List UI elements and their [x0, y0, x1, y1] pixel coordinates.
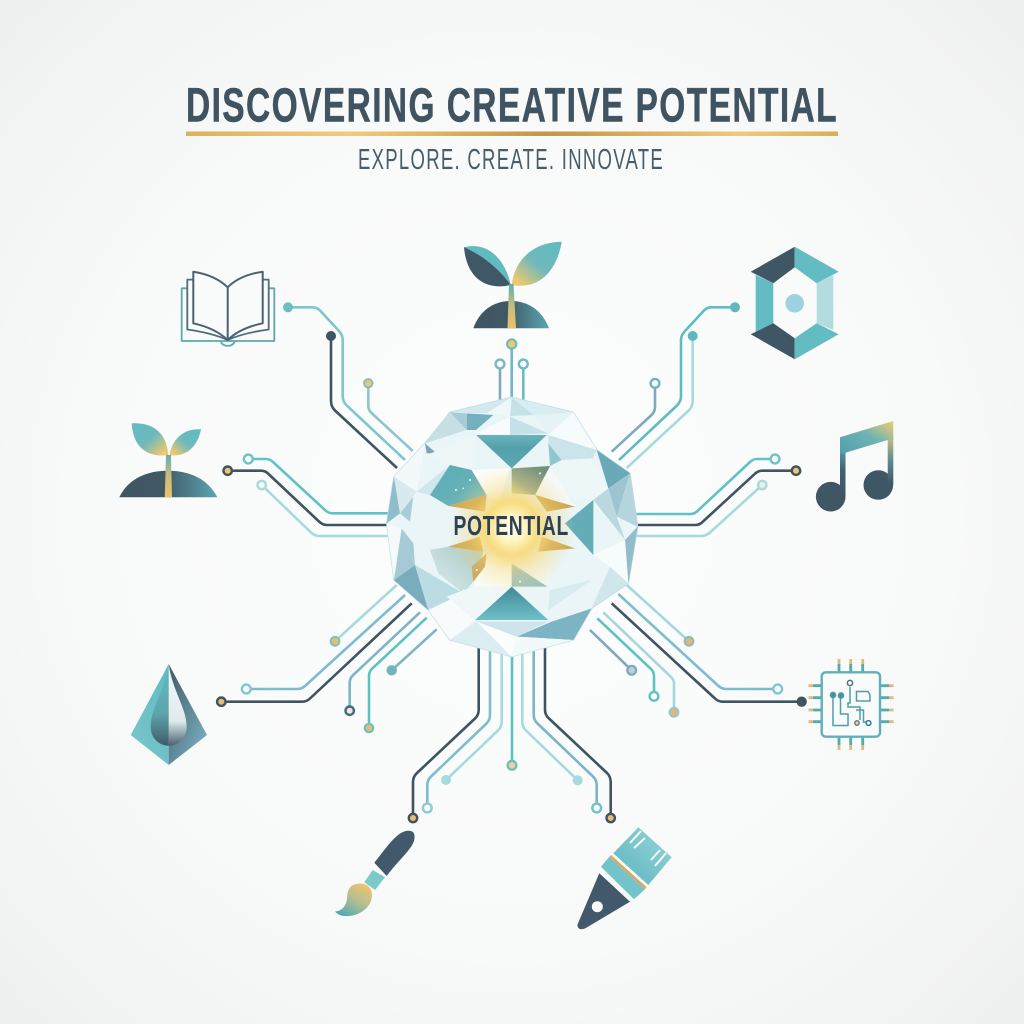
crystal: white sparkles — [455, 472, 546, 592]
connector group: book — [283, 302, 413, 468]
connector group: brushes — [409, 648, 615, 822]
icon: left sprout — [119, 423, 217, 497]
subtitle: EXPLORE. CREATE. INNOVATE — [358, 144, 664, 176]
connector group: droplet — [217, 585, 437, 732]
icon: top sprout — [464, 242, 562, 328]
connector group: left sprout — [224, 455, 388, 536]
icon: open book — [182, 272, 274, 346]
icon: droplet gem — [131, 664, 207, 765]
connector group: microchip — [590, 585, 807, 717]
connector group: top sprout — [496, 339, 528, 404]
icon: microchip — [808, 659, 894, 750]
icon: flat paintbrush — [577, 827, 672, 929]
center label: POTENTIAL — [454, 510, 569, 541]
central crystal — [387, 397, 638, 657]
icon: music note — [816, 421, 893, 512]
gold title rule — [186, 132, 838, 136]
crystal: core facets — [430, 435, 593, 620]
connector group: music note — [636, 455, 800, 536]
icon: round paintbrush — [335, 831, 415, 916]
connector group: top right gem — [612, 302, 740, 468]
crystal: golden glow — [448, 465, 575, 592]
icon: hexagonal gem — [751, 247, 839, 359]
